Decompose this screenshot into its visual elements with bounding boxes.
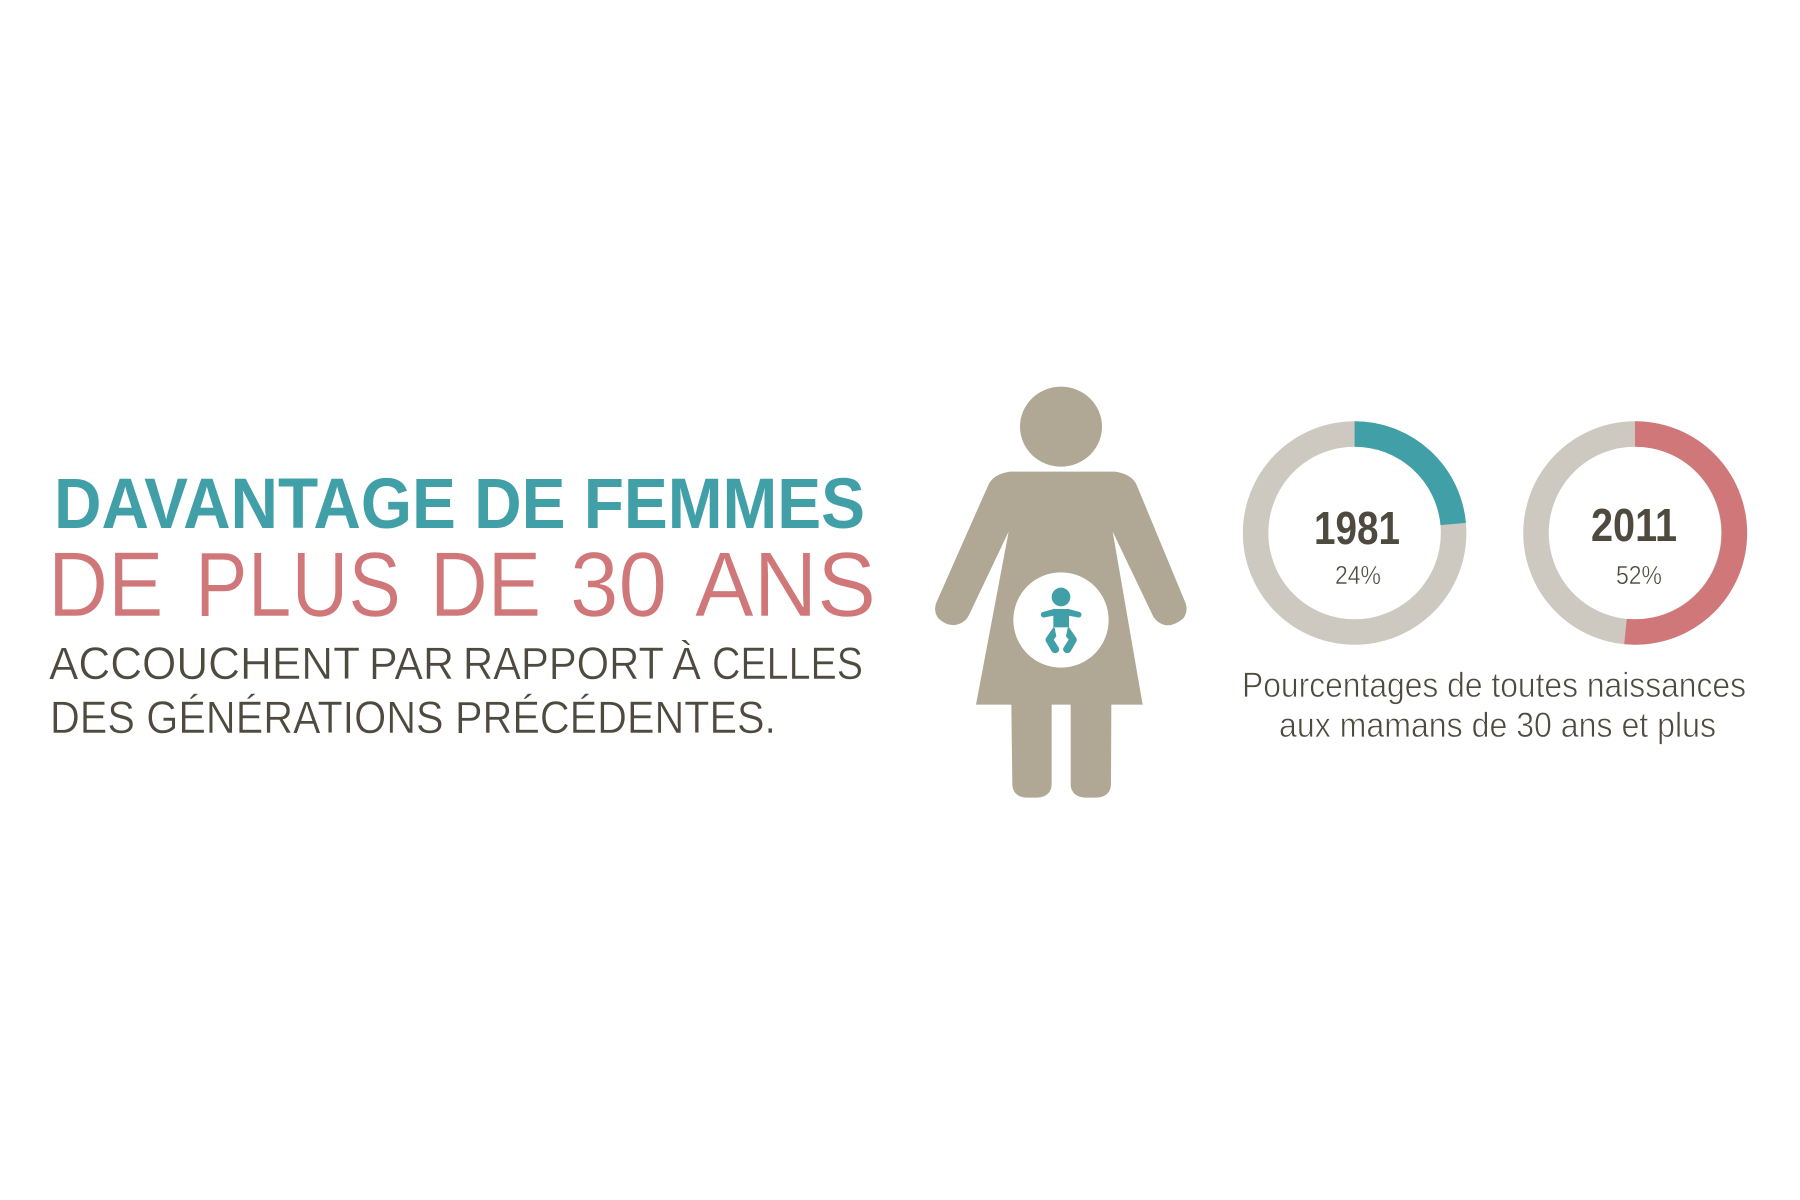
chart: donut 2011 (1536, 434, 1734, 632)
text block: subtitle line 2: DES GÉNÉRATIONS PRÉCÉDENTES. (50, 692, 776, 743)
text block: subtitle line 1: PAR (369, 638, 454, 689)
text block: subtitle line 1: À (672, 638, 701, 689)
woman head (1020, 387, 1102, 467)
text block: subtitle line 1: ACCOUCHENT (49, 638, 360, 689)
value 52%: 52% (1616, 560, 1662, 590)
caption (1242, 666, 1746, 745)
donut segment 24% (1355, 434, 1453, 524)
text block: subtitle line 1 (49, 638, 863, 689)
heading: pink line (48, 534, 876, 636)
donut ring (1256, 434, 1454, 632)
heading: teal line: DAVANTAGE DE FEMMES (54, 465, 865, 544)
icon: pregnant woman (935, 387, 1187, 798)
belly circle (1013, 572, 1109, 668)
year 1981: 1981 (1314, 502, 1400, 554)
donut ring (1536, 434, 1734, 632)
heading: pink line: PLUS (195, 534, 401, 636)
heading: pink line: 30 (570, 534, 667, 636)
panel: headline text (48, 465, 876, 743)
woman body (935, 472, 1187, 798)
text block: subtitle line 1: CELLES (712, 638, 863, 689)
chart: donut 1981 (1256, 434, 1454, 632)
heading: pink line: DE (48, 534, 164, 636)
caption line 1: Pourcentages de toutes naissances (1242, 666, 1746, 705)
caption line 2: aux mamans de 30 ans et plus (1279, 706, 1716, 745)
icon: baby (1041, 588, 1081, 653)
heading: pink line: DE (430, 534, 541, 636)
value 24%: 24% (1335, 560, 1381, 590)
text block: subtitle line 1: RAPPORT (463, 638, 664, 689)
heading: pink line: ANS (695, 534, 876, 636)
year 2011: 2011 (1591, 499, 1677, 551)
donut segment 52% (1626, 434, 1734, 632)
